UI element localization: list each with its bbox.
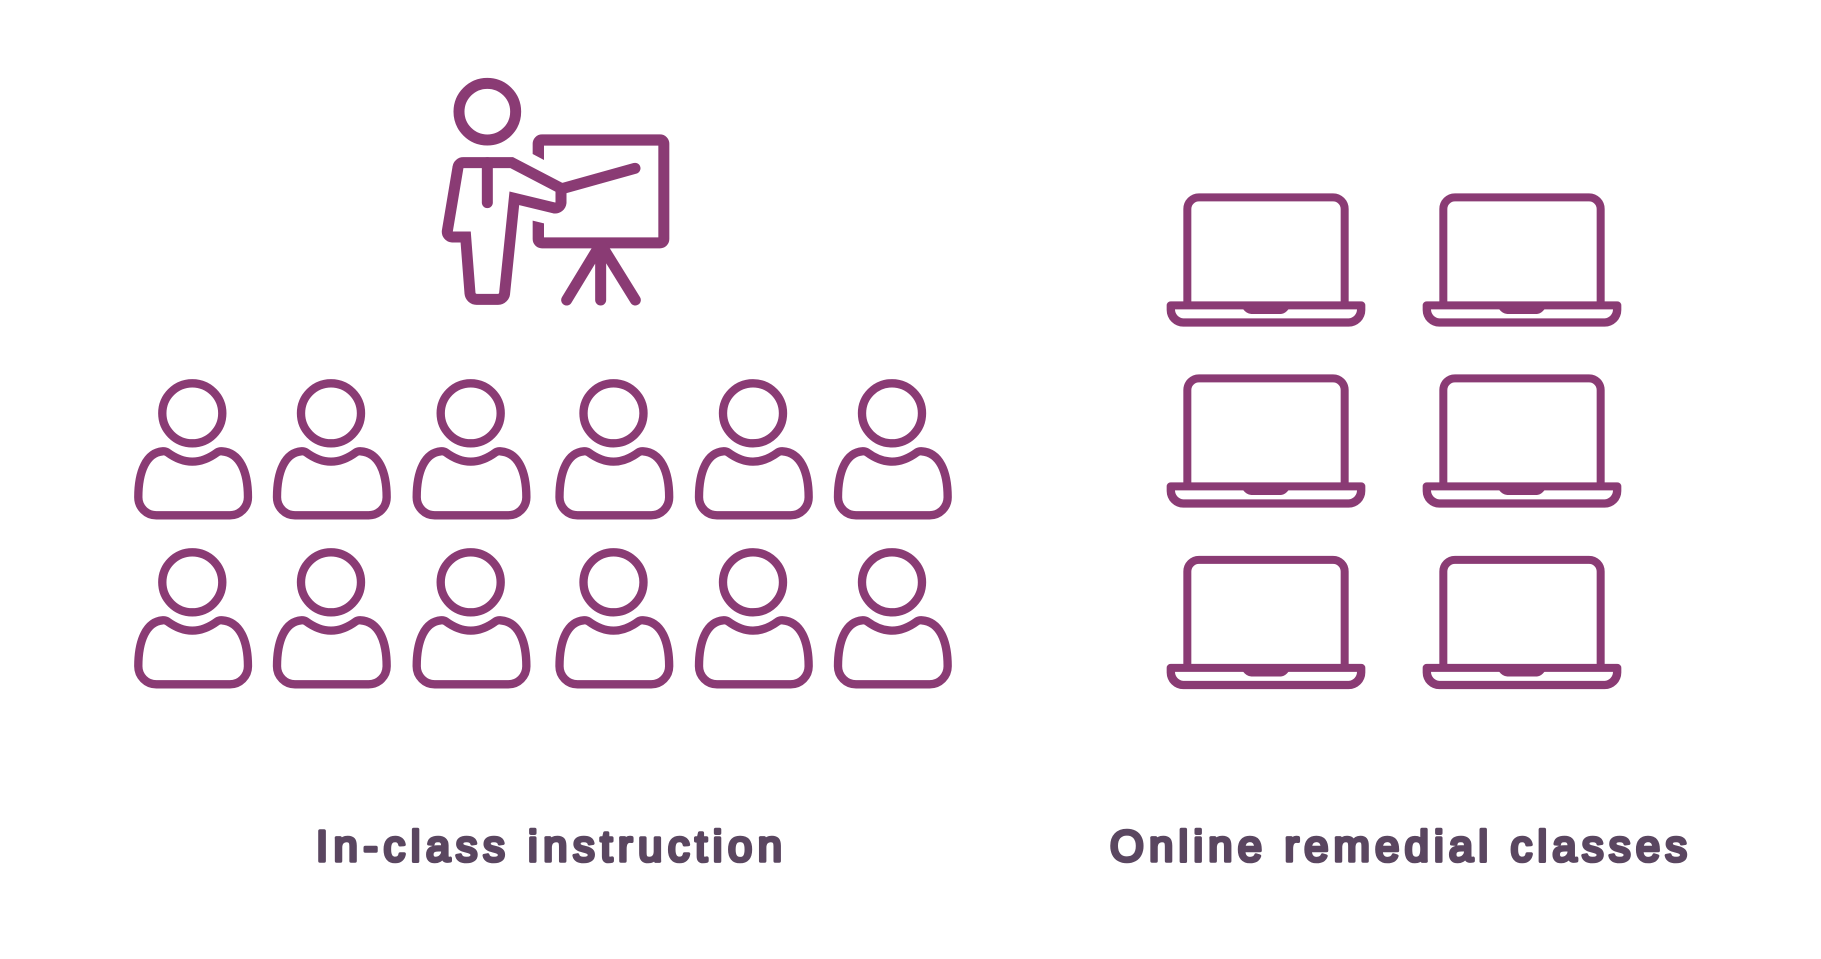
teacher tie [471, 163, 504, 203]
student row 2 [138, 552, 948, 684]
laptop row 1 [1167, 197, 1621, 327]
laptop row 3 [1167, 560, 1621, 689]
laptop row 2 [1167, 378, 1621, 508]
icon: teacher pointing at presentation board [447, 83, 669, 300]
pointer [563, 168, 635, 188]
label: online remedial classes: Online remedial classes [1110, 823, 1687, 871]
board easel legs [567, 244, 635, 300]
presentation board [533, 134, 669, 248]
laptops grid [1167, 197, 1621, 689]
teacher head [459, 83, 516, 140]
label: in-class instruction: In-class instruction [316, 823, 782, 871]
student row 1 [138, 383, 948, 515]
teacher body [447, 163, 561, 299]
students grid [138, 383, 948, 684]
